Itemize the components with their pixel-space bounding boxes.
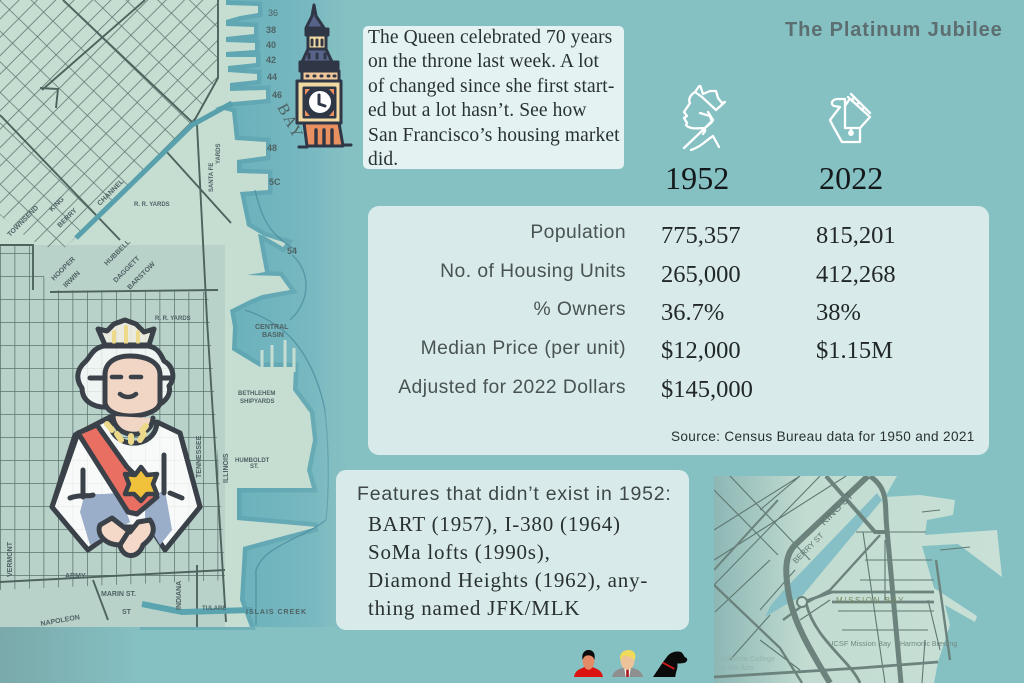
map labels: MISSION BAY: [836, 596, 905, 605]
text block: introduction: on the throne last week. A lot: [368, 51, 599, 72]
map labels: DAGGETT: [112, 255, 142, 284]
table row: Adjusted price: [398, 376, 753, 403]
map labels: ST: [122, 609, 132, 616]
map labels: YARDS: [216, 144, 222, 164]
soft fade at the right map edge: [325, 0, 345, 627]
map: modern Mission Bay: [714, 476, 1002, 683]
map labels: BERRY: [56, 207, 79, 229]
map labels: R. R. YARDS: [155, 316, 191, 322]
table row: Median price: Median Price (per unit): [421, 338, 626, 359]
robe: [52, 417, 200, 550]
table row: Median price: $12,000: [661, 337, 741, 364]
icon: man in red shirt: [574, 650, 603, 677]
map: vintage San Francisco waterfront: [0, 0, 329, 630]
map labels: KING: [48, 196, 66, 213]
map labels: TENNESSEE: [196, 435, 203, 478]
icon: Queen Elizabeth portrait: [50, 318, 202, 558]
table row: Owners: 38%: [816, 299, 861, 326]
table row: Population: Population: [530, 222, 626, 243]
table row: Population: 815,201: [816, 222, 896, 249]
map labels: TULARE: [202, 606, 226, 612]
Central Basin inlet: [262, 340, 294, 372]
map labels: BETHLEHEM: [238, 391, 275, 397]
street grid: downtown diagonals: [0, 0, 230, 255]
table row: Owners: [533, 299, 861, 326]
map labels: BARSTOW: [126, 261, 157, 291]
map labels: BASIN: [262, 332, 284, 339]
table row: Owners: % Owners: [533, 299, 626, 320]
water: [0, 0, 345, 627]
heading: 1952: 1952: [665, 160, 729, 196]
map labels: R. R. YARDS: [134, 202, 170, 208]
text block: introduction: did.: [368, 149, 398, 170]
heading: 2022: 2022: [819, 160, 883, 196]
channel water: [765, 493, 882, 617]
table row: Population: [530, 222, 896, 249]
map labels: [6, 8, 307, 628]
panel: features that didn't exist: [336, 470, 689, 630]
map labels: TOWNSEND: [6, 205, 40, 238]
coast contour lines: [245, 190, 328, 625]
map labels: 36: [268, 8, 278, 18]
crown: [98, 320, 154, 345]
map labels: 42: [266, 55, 276, 65]
necklace: [113, 416, 153, 434]
map labels: SHIPYARDS: [240, 399, 274, 405]
land tint (left side): [0, 245, 225, 627]
major streets: [714, 476, 950, 683]
table row: Adjusted price: $145,000: [661, 376, 753, 403]
map labels: Harmonic Brewing: [900, 641, 957, 648]
street grid: Potrero blocks: [0, 245, 226, 590]
hair: [78, 346, 173, 407]
map labels: INDIANA: [176, 581, 183, 610]
map labels: VERMONT: [7, 541, 14, 577]
folded hands: [99, 518, 153, 556]
map labels: HUBBELL: [103, 238, 133, 267]
table row: Owners: 36.7%: [661, 299, 724, 326]
table row: Housing units: No. of Housing Units: [440, 261, 626, 282]
land: [0, 0, 317, 627]
map labels: CHANNEL: [96, 178, 126, 207]
map labels: ARMY: [65, 573, 86, 580]
icon: black dog with red collar: [653, 652, 688, 677]
map labels: 46: [272, 90, 282, 100]
features heading: Features that didn’t exist in 1952:: [357, 483, 672, 505]
map labels: 40: [266, 40, 276, 50]
text block: introduction: [363, 26, 624, 169]
map labels: ISLAIS CREEK: [246, 609, 307, 616]
table row: Housing units: [440, 261, 896, 288]
features list: SoMa lofts (1990s),: [368, 540, 551, 564]
icon: older Queen profile, 2022: [828, 92, 872, 144]
table row: Median price: $1.15M: [816, 337, 893, 364]
map labels: 5C: [269, 177, 281, 187]
table row: Median price: [421, 337, 893, 364]
map labels: 44: [267, 72, 277, 82]
map labels: [716, 490, 957, 672]
upper stage: [306, 29, 328, 35]
map labels: of the Arts: [720, 663, 754, 672]
roundabout: [797, 597, 807, 607]
face: [105, 356, 160, 416]
table row: Housing units: 412,268: [816, 261, 896, 288]
table row: Population: 775,357: [661, 222, 741, 249]
table row: Housing units: 265,000: [661, 261, 741, 288]
map labels: BAY: [273, 101, 306, 143]
features list: thing named JFK/MLK: [368, 596, 580, 620]
map labels: NAPOLEON: [40, 614, 80, 628]
star medal: [125, 467, 157, 501]
map labels: ILLINOIS: [223, 453, 230, 483]
text block: introduction: ed but a lot hasn’t. See how: [368, 100, 587, 121]
map labels: MARIN ST.: [101, 591, 136, 598]
map labels: KING ST: [818, 490, 856, 528]
features list: Diamond Heights (1962), any-: [368, 568, 648, 592]
clock case: [297, 81, 341, 123]
icon: clock tower: [296, 4, 352, 148]
features list: [368, 512, 648, 620]
map labels: HOOPER: [50, 256, 77, 282]
icon: blond man in grey suit: [612, 650, 643, 677]
text block: introduction: The Queen celebrated 70 years: [368, 27, 612, 48]
text block: introduction: of changed since she first start-: [368, 76, 614, 97]
map labels: SANTA FE: [209, 163, 215, 192]
title: The Platinum Jubilee: [785, 19, 1003, 41]
map labels: BERRY ST: [791, 531, 826, 565]
China Basin channel: [76, 103, 232, 238]
Islais Creek: [142, 604, 252, 612]
map labels: 38: [266, 25, 276, 35]
map labels: 48: [267, 143, 277, 153]
clock face: [308, 90, 332, 114]
red sash: [78, 425, 157, 514]
map labels: HUMBOLDT: [235, 458, 270, 464]
map labels: California College: [716, 654, 775, 663]
map labels: UCSF Mission Bay: [828, 639, 891, 648]
map labels: IRWIN: [62, 270, 82, 289]
belfry: [302, 49, 332, 62]
table row: Adjusted price: Adjusted for 2022 Dollars: [398, 377, 626, 398]
panel: housing comparison table: [368, 206, 989, 455]
features list: BART (1957), I-380 (1964): [368, 512, 621, 536]
blue sleeve band: [80, 490, 172, 545]
band: [300, 62, 338, 71]
minor streets: [714, 476, 970, 683]
source note: Source: Census Bureau data for 1950 and 2021: [671, 429, 975, 444]
map labels: CENTRAL: [255, 324, 289, 331]
land: [714, 476, 1002, 683]
map labels: 54: [287, 246, 297, 256]
text block: introduction: San Francisco’s housing market: [368, 125, 620, 146]
bottom strip shading: [0, 627, 140, 683]
main roads: [0, 0, 231, 627]
spire: [306, 5, 324, 28]
icon: young Queen profile, 1952: [682, 85, 726, 152]
map labels: ST.: [250, 464, 259, 470]
base: [304, 123, 343, 146]
